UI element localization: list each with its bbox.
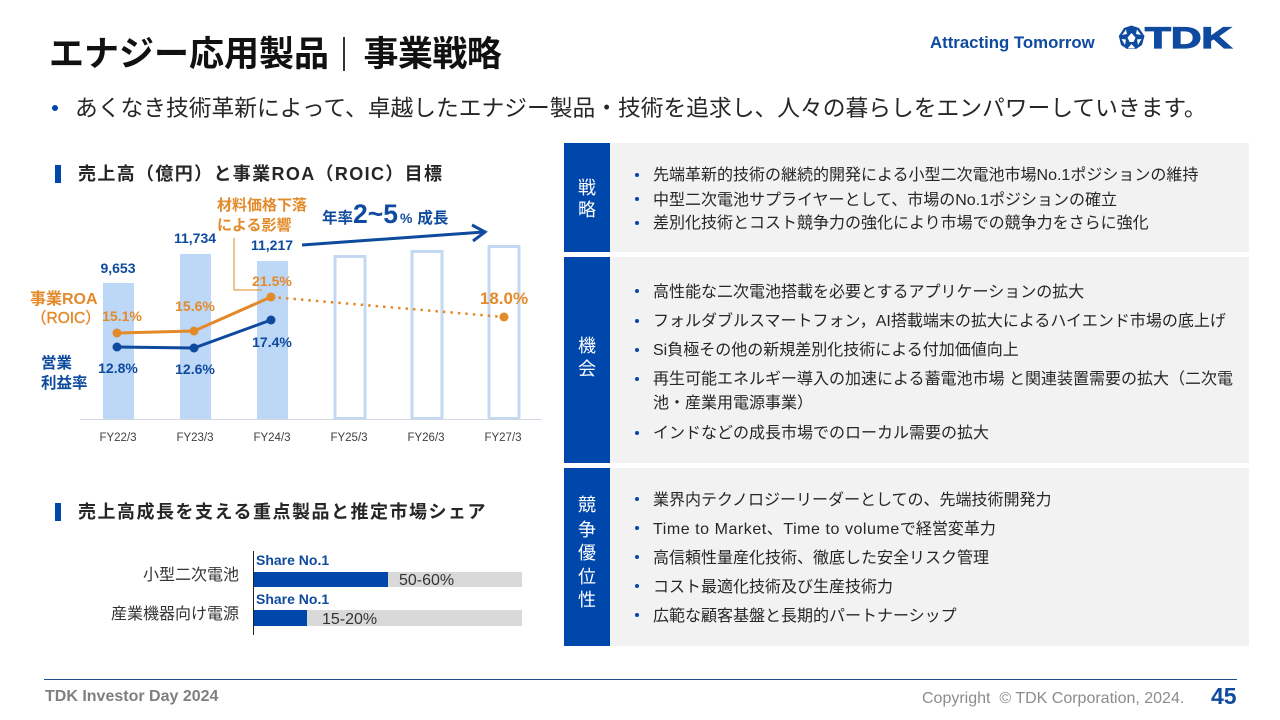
side label: competitive advantage: 位 [578,567,596,587]
ROA line [112,292,508,338]
opportunities bullet list: 再生可能エネルギー導入の加速による蓄電池市場 と関連装置需要の拡大（二次電 [653,371,1233,388]
row: industrial power supplies: 産業機器向け電源 [111,605,239,623]
chart: sales bars with ROA and margin lines [30,196,542,444]
logo: TDK [1118,24,1234,51]
row: industrial power supplies: Share No.1 [256,591,329,607]
row: small secondary batteries: 小型二次電池 [143,566,239,584]
ROA value labels: 18.0% [480,289,528,308]
competitive advantage bullet list: Time to Market、Time to volumeで経営変革力 [653,521,996,538]
x axis labels: FY24/3 [253,432,291,444]
series label: operating margin: 営業 [41,353,73,372]
x axis labels: FY27/3 [484,432,522,444]
side label: strategy: 戦 [578,178,596,198]
opportunities bullet list: フォルダブルスマートフォン，AI搭載端末の拡大によるハイエンド市場の底上げ [653,313,1226,330]
side label: competitive advantage: 争 [578,520,596,540]
strategy bullet list: 中型二次電池サプライヤーとして、市場のNo.1ポジションの確立 [653,192,1117,209]
competitive advantage bullet list: コスト最適化技術及び生産技術力 [653,579,893,596]
footer: copyright: Copyright © TDK Corporation, 2024. [922,690,1184,707]
opportunities bullet list: インドなどの成長市場でのローカル需要の拡大 [653,425,989,442]
side label: opportunities [564,257,610,463]
series label: operating margin: 利益率 [41,374,88,392]
series label: ROA: 事業ROA [30,289,98,308]
material price callout: 材料価格下落 [217,196,307,214]
heading: sales and ROA targets: 売上高（億円）と事業ROA（ROIC）目標 [78,164,443,184]
x axis labels [99,432,522,444]
strategy bullet list [635,166,1198,232]
sales value labels: 9,653 [100,260,136,276]
target sales bars [335,246,519,418]
ROA value labels: 15.1% [102,308,142,324]
material price callout: による影響 [217,216,292,234]
opportunities bullet list [635,283,1233,442]
growth label: 年率2~5% 成長 [322,199,449,229]
competitive advantage bullet list: 広範な顧客基盤と長期的パートナーシップ [653,608,957,625]
opportunities bullet list: Si負極その他の新規差別化技術による付加価値向上 [653,342,1019,359]
row: small secondary batteries [143,552,522,589]
chart: estimated market share [111,551,522,635]
sales value labels [100,230,293,276]
page number: 45 [1211,683,1237,709]
margin value labels [98,334,292,377]
strategy bullet list: 差別化技術とコスト競争力の強化により市場での競争力をさらに強化 [653,215,1149,232]
x axis labels: FY22/3 [99,432,137,444]
sales value labels: 11,217 [251,237,293,253]
subtitle bullet point: あくなき技術革新によって、卓越したエナジー製品・技術を追求し、人々の暮らしをエンパワーしていきます。 [75,95,1207,121]
series label: ROA [30,289,101,327]
strategy bullet list: 先端革新的技術の継続的開発による小型二次電池市場No.1ポジションの維持 [653,167,1198,184]
competitive advantage bullet list: 高信頼性量産化技術、徹底した安全リスク管理 [653,550,989,567]
x axis labels: FY25/3 [330,432,368,444]
row: small secondary batteries: Share No.1 [256,552,329,568]
sales value labels: 11,734 [174,230,216,246]
opportunities bullet list: 高性能な二次電池搭載を必要とするアプリケーションの拡大 [653,284,1084,301]
opportunities bullet list: 池・産業用電源事業） [653,395,813,412]
margin value labels: 17.4% [252,334,292,350]
ROA value labels [102,273,528,324]
row: industrial power supplies: 15-20% [322,611,377,628]
growth arrow [302,225,485,245]
x axis labels: FY26/3 [407,432,445,444]
side label: opportunities: 会 [578,359,596,379]
tagline: Attracting Tomorrow: Attracting Tomorrow [930,33,1095,52]
side label: competitive advantage [564,468,610,646]
heading: key products and market share: 売上高成長を支える重点製品と推定市場シェア [78,502,487,522]
side label: competitive advantage: 競 [578,495,596,515]
margin value labels: 12.6% [175,361,215,377]
side label: strategy: 略 [578,200,596,220]
side label: opportunities: 機 [578,336,596,356]
material price callout [217,196,307,234]
margin value labels: 12.8% [98,360,138,376]
side label: competitive advantage: 性 [578,590,596,610]
series label: operating margin [41,353,88,392]
series label: ROA: （ROIC） [31,310,101,327]
ROA value labels: 21.5% [252,273,292,289]
panel: strategy [564,143,1249,252]
row: industrial power supplies [111,591,522,628]
footer: event name: TDK Investor Day 2024 [45,688,218,705]
title: エナジー応用製品 事業戦略 [49,35,501,74]
side label: strategy [564,143,610,252]
ROA value labels: 15.6% [175,298,215,314]
operating margin line [112,316,276,352]
x axis labels: FY23/3 [176,432,214,444]
row: small secondary batteries: 50-60% [399,572,454,589]
panel: opportunities [564,257,1249,463]
competitive advantage bullet list: 業界内テクノロジーリーダーとしての、先端技術開発力 [653,492,1052,509]
panel: competitive advantage [564,468,1249,646]
side label: competitive advantage: 優 [578,543,596,563]
actual sales bars [103,254,288,419]
